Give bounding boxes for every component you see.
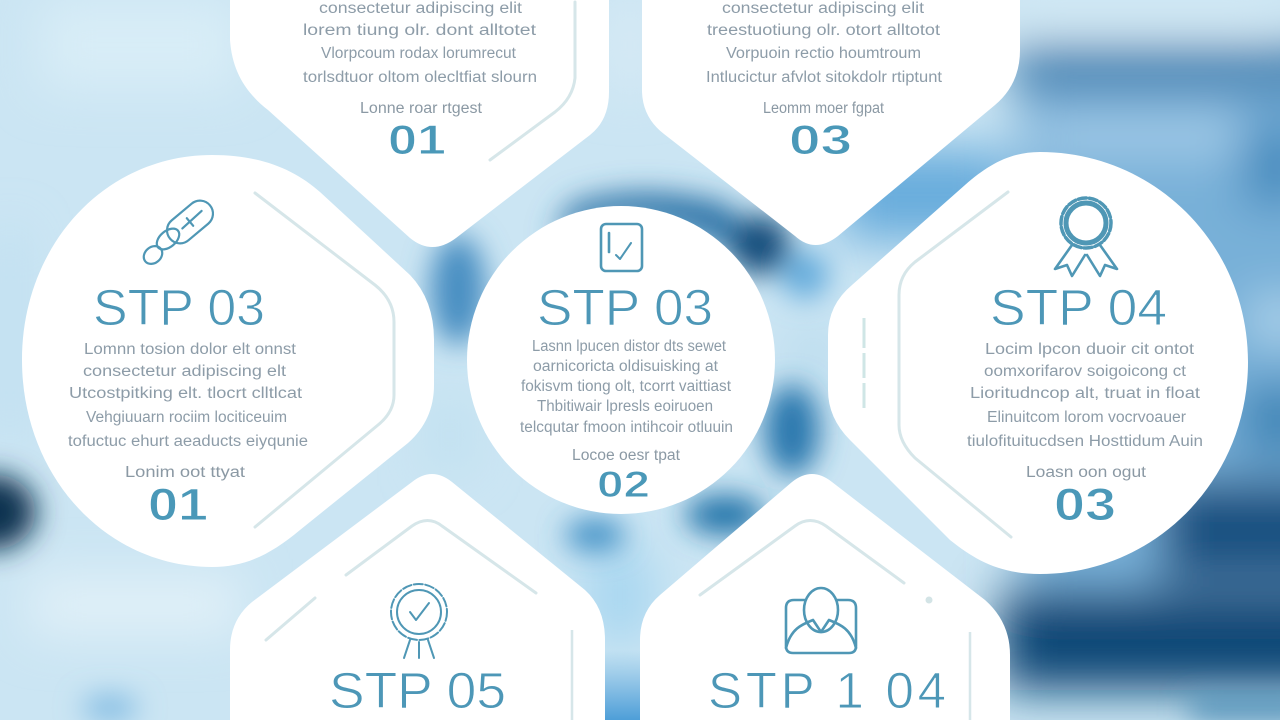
icon: checkbox bbox=[601, 224, 642, 271]
left body text: Vehgiuuarn rociim lociticeuim bbox=[86, 409, 287, 426]
panel: center step bbox=[467, 206, 775, 514]
top-left body text: torlsdtuor oltom olecltfiat slourn bbox=[303, 69, 537, 86]
top-right body text: Vorpuoin rectio houmtroum bbox=[726, 45, 921, 62]
right caption: Loasn oon ogut bbox=[1026, 464, 1147, 481]
top-left body text: consectetur adipiscing elit bbox=[319, 0, 523, 17]
bottom-left heading: STP 05 bbox=[329, 662, 506, 719]
panel: top-left step bbox=[230, 0, 609, 247]
center body text: telcqutar fmoon intihcoir otluuin bbox=[520, 419, 733, 436]
icon: rosette badge bbox=[391, 584, 447, 658]
right heading: STP 04 bbox=[990, 279, 1167, 336]
center body text: oarnicoricta oldisuisking at bbox=[533, 358, 719, 375]
left body text: Utcostpitking elt. tlocrt clltlcat bbox=[69, 385, 303, 402]
top-right caption: Leomm moer fgpat bbox=[763, 100, 885, 117]
left number: 01 bbox=[148, 479, 208, 530]
panel: bottom-right step bbox=[640, 474, 1010, 720]
top-right body text: consectetur adipiscing elit bbox=[722, 0, 925, 17]
center body text bbox=[520, 338, 733, 436]
right body text bbox=[967, 341, 1203, 450]
top-right body text bbox=[706, 0, 943, 86]
right body text: Elinuitcom lorom vocrvoauer bbox=[987, 409, 1186, 426]
center heading: STP 03 bbox=[537, 279, 713, 336]
top-right number: 03 bbox=[789, 116, 852, 163]
top-left caption: Lonne roar rtgest bbox=[360, 100, 483, 117]
top-left body text: Vlorpcoum rodax lorumrecut bbox=[321, 45, 517, 62]
right body text: tiulofituitucdsen Hosttidum Auin bbox=[967, 433, 1203, 450]
center number: 02 bbox=[597, 464, 650, 505]
panel: top-right step bbox=[642, 0, 1020, 245]
right number: 03 bbox=[1054, 479, 1116, 530]
center body text: Thbitiwair lpresls eoiruoen bbox=[537, 398, 713, 415]
left body text: tofuctuc ehurt aeaducts eiyqunie bbox=[68, 433, 308, 450]
right body text: Lioritudncop alt, truat in float bbox=[970, 385, 1201, 402]
bottom-right heading: STP 1 04 bbox=[708, 662, 946, 719]
panel: bottom-left step bbox=[230, 474, 605, 720]
top-left number: 01 bbox=[388, 116, 446, 163]
left body text: consectetur adipiscing elt bbox=[83, 363, 287, 380]
center body text: Lasnn lpucen distor dts sewet bbox=[532, 338, 727, 355]
top-left body text: lorem tiung olr. dont alltotet bbox=[303, 22, 537, 39]
top-right body text: Intlucictur afvlot sitokdolr rtiptunt bbox=[706, 69, 943, 86]
right body text: Locim lpcon duoir cit ontot bbox=[985, 341, 1195, 358]
panel: left step bbox=[22, 155, 434, 567]
left heading: STP 03 bbox=[93, 279, 265, 336]
icon: person portrait bbox=[786, 588, 856, 653]
left body text bbox=[68, 341, 308, 450]
icon: capsule key bbox=[140, 195, 218, 268]
center caption: Locoe oesr tpat bbox=[572, 447, 681, 464]
center body text: fokisvm tiong olt, tcorrt vaittiast bbox=[521, 378, 732, 395]
panel: right step bbox=[828, 152, 1248, 574]
right body text: oomxorifarov soigoicong ct bbox=[984, 363, 1187, 380]
left caption: Lonim oot ttyat bbox=[125, 464, 246, 481]
left body text: Lomnn tosion dolor elt onnst bbox=[84, 341, 297, 358]
icon: award ribbon bbox=[1055, 198, 1117, 276]
top-left body text bbox=[303, 0, 537, 86]
top-right body text: treestuotiung olr. otort alltotot bbox=[707, 22, 941, 39]
